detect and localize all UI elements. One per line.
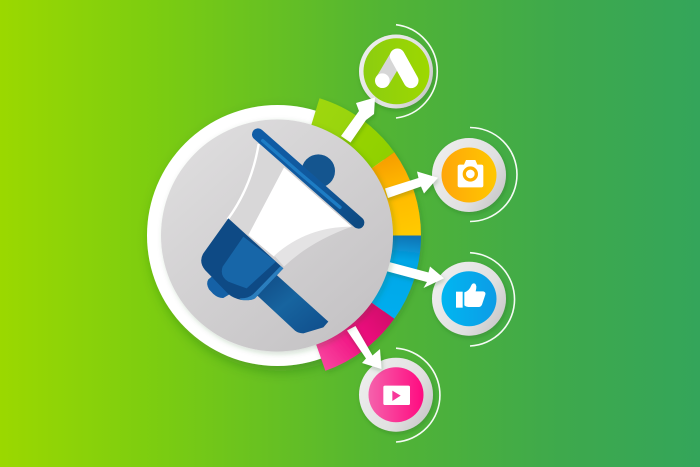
megaphone handle bbox=[257, 275, 328, 333]
orbit arc bbox=[470, 253, 515, 346]
badge fill bbox=[368, 367, 424, 422]
megaphone side knob bbox=[207, 277, 230, 298]
badge ring bbox=[359, 34, 433, 108]
arrow: to video icon bbox=[347, 326, 382, 369]
arrow: to ads icon bbox=[341, 98, 375, 142]
badge ring bbox=[359, 358, 433, 432]
icon badge: camera bbox=[432, 128, 517, 222]
badge fill bbox=[364, 38, 430, 104]
ads logo bbox=[375, 56, 411, 88]
orbit arc bbox=[470, 128, 517, 222]
white outer disc bbox=[147, 105, 408, 366]
orbit arc bbox=[396, 25, 437, 118]
badge ring bbox=[432, 262, 506, 336]
megaphone body bottom rim bbox=[239, 266, 283, 300]
cone highlight edge bbox=[228, 144, 259, 219]
megaphone body lighter panel bbox=[222, 237, 276, 288]
megaphone dome bbox=[302, 154, 335, 188]
orbit arc bbox=[396, 348, 440, 442]
badge ring bbox=[432, 138, 506, 212]
icon badge: video bbox=[359, 348, 440, 442]
arrow: to like icon bbox=[386, 262, 444, 288]
megaphone top bar bbox=[258, 134, 358, 223]
icon badge: like bbox=[432, 253, 515, 346]
badge fill bbox=[442, 148, 496, 202]
cone white face bbox=[248, 167, 352, 257]
badge fill bbox=[442, 271, 496, 326]
cone lower shade bbox=[274, 227, 352, 267]
megaphone bar highlight bbox=[263, 141, 340, 207]
thumbs up glyph bbox=[456, 283, 485, 308]
segment: green bbox=[308, 98, 394, 174]
megaphone body bbox=[201, 218, 283, 300]
play glyph bbox=[383, 386, 410, 405]
segment: blue bbox=[363, 236, 421, 319]
camera glyph bbox=[458, 160, 483, 187]
grey inner disc bbox=[161, 120, 393, 352]
segment: pink bbox=[313, 296, 394, 371]
megaphone cone bbox=[228, 143, 352, 267]
arrow: to camera icon bbox=[385, 172, 438, 198]
cone shaded strip bbox=[228, 143, 284, 235]
icon: megaphone bbox=[201, 134, 358, 333]
icon badge: Google Ads bbox=[359, 25, 437, 118]
segmented colour ring bbox=[308, 98, 421, 371]
segment: orange bbox=[363, 152, 421, 236]
